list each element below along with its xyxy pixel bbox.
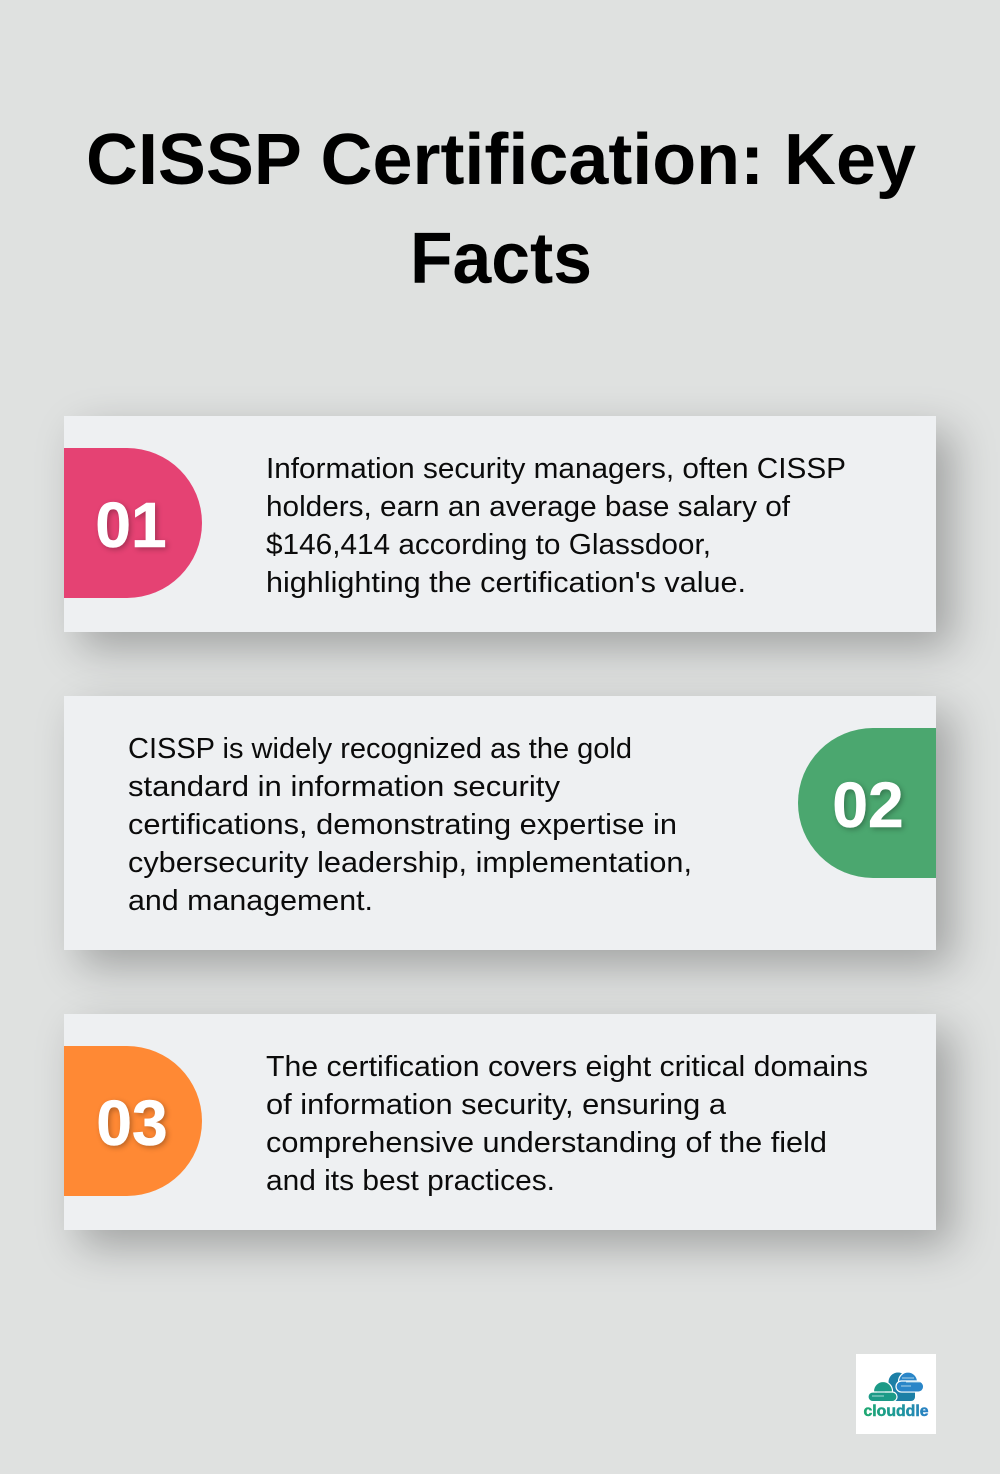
- title: Facts: [410, 219, 592, 299]
- text block: eight domains fact: of information security, ensuring a: [266, 1089, 727, 1121]
- text block: gold standard fact: standard in information security: [128, 771, 561, 803]
- text block: gold standard fact: CISSP is widely recognized as the gold: [128, 733, 632, 765]
- badge: 01: 01: [95, 489, 167, 561]
- panel: fact 01: [64, 416, 936, 632]
- badge: 02: [798, 728, 936, 878]
- title: CISSP Certification: Key: [86, 120, 916, 200]
- panel: fact 03: [64, 1014, 936, 1230]
- badge: 02: 02: [832, 769, 904, 841]
- logo: clouddle: [856, 1354, 936, 1434]
- text block: salary fact: highlighting the certification's value.: [266, 567, 746, 599]
- text block: eight domains fact: The certification covers eight critical domains: [266, 1051, 868, 1083]
- title: [86, 120, 916, 299]
- text block: eight domains fact: comprehensive understanding of the field: [266, 1127, 827, 1159]
- logo wordmark: clouddle: [864, 1403, 929, 1420]
- text block: gold standard fact: cybersecurity leadership, implementation,: [128, 847, 692, 879]
- icon: clouds: [868, 1372, 924, 1402]
- badge: 03: 03: [96, 1087, 168, 1159]
- panel: fact 02: [64, 696, 936, 950]
- text block: salary fact: [266, 453, 846, 599]
- text block: eight domains fact: [266, 1051, 868, 1197]
- text block: gold standard fact: and management.: [128, 885, 373, 917]
- text block: gold standard fact: certifications, demonstrating expertise in: [128, 809, 677, 841]
- text block: salary fact: $146,414 according to Glassdoor,: [266, 529, 711, 561]
- badge: 03: [64, 1046, 202, 1196]
- text block: eight domains fact: and its best practices.: [266, 1165, 555, 1197]
- badge: 01: [64, 448, 202, 598]
- text block: gold standard fact: [128, 733, 692, 917]
- text block: salary fact: Information security managers, often CISSP: [266, 453, 846, 485]
- text block: salary fact: holders, earn an average base salary of: [266, 491, 791, 523]
